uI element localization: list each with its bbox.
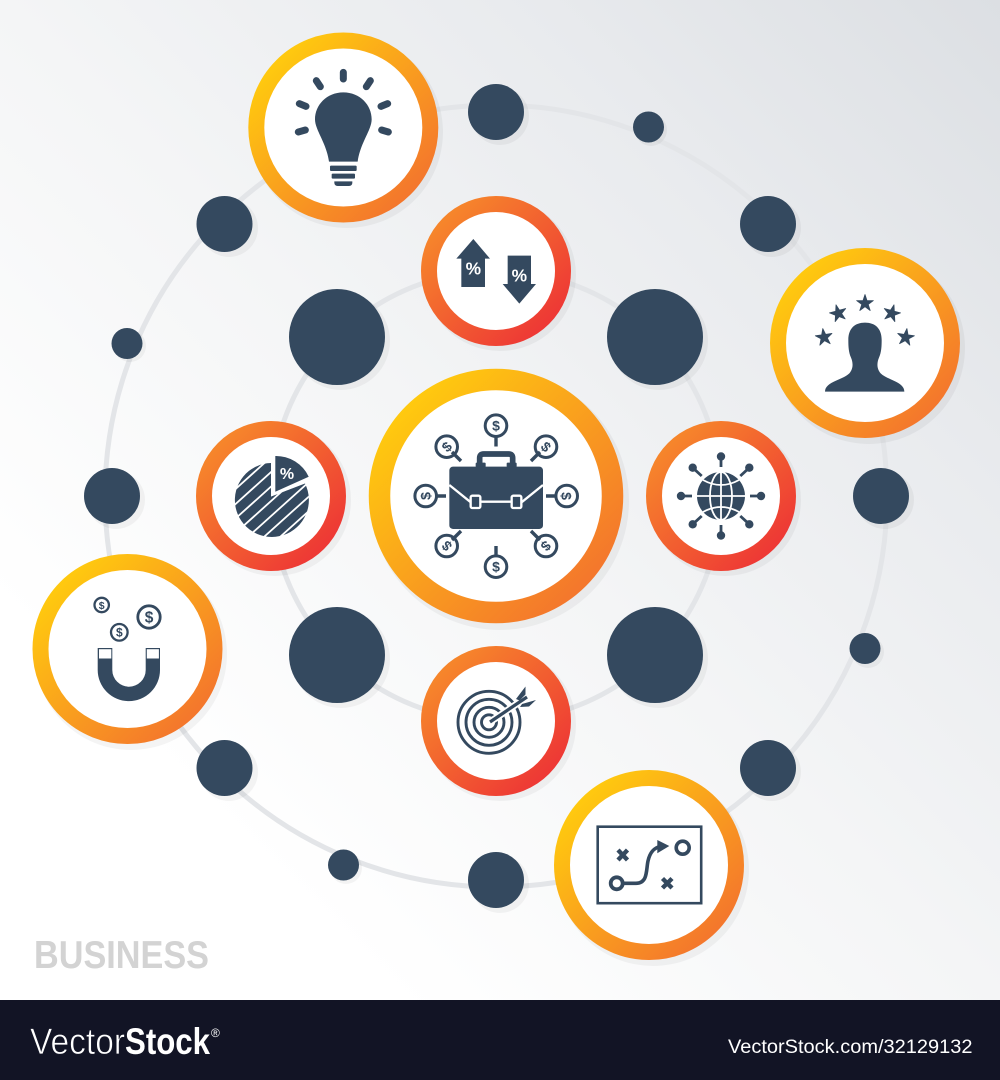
small navy dots on outer track [112,112,880,880]
panel: lightbulb [256,40,430,214]
panel: central briefcase [380,380,612,612]
icon: target with arrow [458,686,536,753]
footer logo: ® [211,1026,220,1040]
icon: dollar lenses around briefcase: $ [492,559,500,575]
icon: lightbulb [298,72,388,186]
icon: dollar lenses around briefcase: $ [418,492,434,500]
icon: dollar lenses around briefcase: $ [537,538,554,555]
icon: magnet attracting coins: $ [116,626,123,640]
connecting tracks [105,105,887,887]
footer logo [30,1021,220,1062]
icon: dollar lenses around briefcase: $ [538,438,555,455]
big navy dots on inner track [289,289,703,703]
icon: dollar lenses around briefcase [415,415,578,578]
icon: dollar lenses around briefcase: $ [559,492,575,500]
footer logo: Vector [30,1021,125,1062]
icon: up and down percent arrows [456,239,536,304]
panel: strategy map [562,778,736,952]
panel: global network [654,429,788,563]
icon: plan map [598,827,701,903]
icon: dollar lenses around briefcase: $ [438,537,455,554]
footer image id: VectorStock.com/32129132 [728,1036,972,1058]
icon: striped pie with percent slice [234,456,309,537]
icon: magnet attracting coins [94,598,160,701]
panel: pie chart [204,418,338,586]
icon: magnet attracting coins: $ [99,600,105,612]
icon: dollar lenses around briefcase: $ [492,418,500,434]
icon: up and down percent arrows: % [512,266,527,286]
heading: BUSINESS: BUSINESS [34,934,209,977]
icon: dollar lenses around briefcase: $ [438,438,455,455]
panel: percentage arrows [429,204,563,338]
icon: person with five stars [814,294,915,392]
panel: star rated person [778,256,952,430]
footer logo: Stock [125,1021,210,1062]
icon: magnet attracting coins: $ [145,610,154,626]
icon: globe with spokes [677,452,765,540]
panel: magnet [40,562,214,736]
footer band [0,1000,1000,1080]
icon: striped pie with percent slice: % [280,466,294,483]
medium navy dots on outer track [84,84,909,908]
icon: up and down percent arrows: % [466,258,481,278]
panel: target [429,654,563,788]
icon: briefcase [449,454,543,529]
